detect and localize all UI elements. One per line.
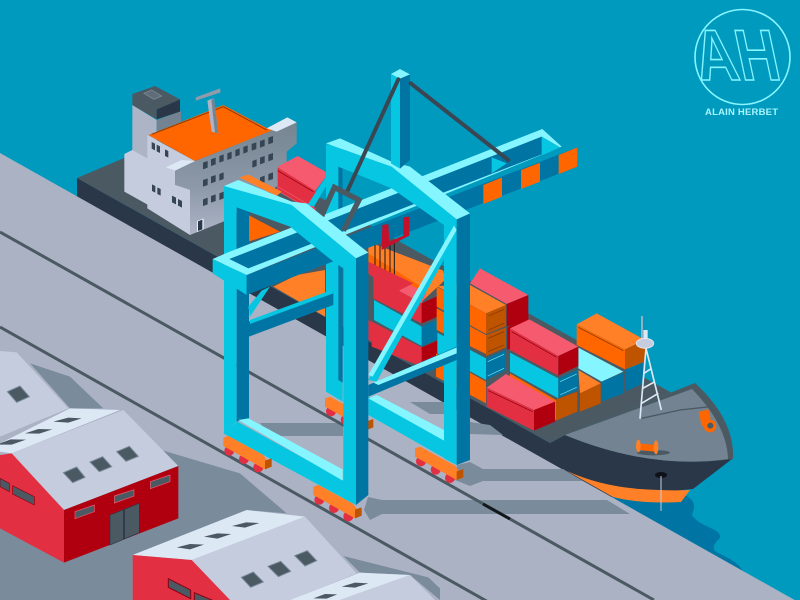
windows <box>75 475 170 519</box>
winch right <box>699 409 716 432</box>
bogie: front left <box>223 436 272 472</box>
red front container <box>487 374 555 431</box>
orange waterline <box>567 471 690 502</box>
back arch <box>326 138 470 225</box>
cables <box>347 79 508 193</box>
bow deck <box>565 383 733 462</box>
red high container <box>510 319 578 376</box>
ship bridge <box>124 86 297 235</box>
red lower extension <box>368 320 422 363</box>
trolley <box>322 187 359 231</box>
water shadow under bow <box>600 490 743 571</box>
radar mast <box>196 88 221 133</box>
red back container <box>470 268 528 350</box>
logo circle <box>695 10 790 104</box>
funnel <box>132 86 181 180</box>
small upper brace <box>307 168 333 207</box>
warehouse: bottom right <box>290 573 435 600</box>
orange second container <box>437 308 506 356</box>
long diagonal brace <box>368 225 457 382</box>
near wing <box>166 160 195 171</box>
door <box>110 503 139 545</box>
bogie: back left <box>325 397 373 433</box>
deck <box>77 128 695 443</box>
orange small stack <box>578 370 601 412</box>
back legs <box>326 145 470 465</box>
anchor hole <box>655 472 667 478</box>
cyan far container <box>578 348 643 402</box>
orange center stack <box>368 245 445 302</box>
warehouse: bottom <box>133 510 357 600</box>
bogie: back right <box>415 447 463 483</box>
rear block <box>124 150 150 206</box>
orange top far container <box>577 313 645 369</box>
red center container <box>368 263 437 323</box>
rail lines <box>0 232 654 600</box>
logo monogram: AH <box>686 16 787 96</box>
side face <box>147 135 195 235</box>
front bottom beam <box>223 418 356 505</box>
front lower brace <box>248 287 333 337</box>
quay <box>0 153 800 600</box>
boom <box>213 129 577 295</box>
shadows <box>30 363 103 408</box>
containers behind crane <box>239 156 445 367</box>
front arch <box>224 180 368 268</box>
crane shadows on quay <box>260 402 630 520</box>
red lower container <box>372 322 437 367</box>
bogie: front right <box>313 485 362 521</box>
back lower brace <box>368 347 457 397</box>
containers foreground <box>368 268 716 455</box>
back bottom beam <box>368 395 457 465</box>
winch left <box>636 440 670 455</box>
warehouses <box>0 351 440 600</box>
cyan low container <box>437 333 506 380</box>
dark hull side <box>77 178 732 500</box>
warehouse: middle <box>0 408 178 563</box>
red rear container <box>278 156 328 213</box>
mast <box>636 316 661 419</box>
door <box>197 218 204 232</box>
mast shadow <box>642 407 710 418</box>
orange right low <box>507 373 577 421</box>
orange roof <box>148 105 272 161</box>
anchor chain <box>660 476 662 511</box>
cyan center container <box>374 300 437 347</box>
orange bottom row <box>436 353 486 403</box>
cyan middle container <box>510 353 578 398</box>
orange upper container <box>437 285 506 334</box>
windows <box>152 136 273 208</box>
front right leg <box>343 253 368 505</box>
logo <box>686 10 790 118</box>
tower <box>391 69 410 169</box>
ship hull <box>77 128 733 511</box>
hazard stripes <box>483 147 577 204</box>
logo name: ALAIN HERBET <box>705 107 778 118</box>
front left leg <box>224 186 249 433</box>
spreader <box>368 217 413 298</box>
orange rear containers <box>239 175 325 317</box>
gantry crane <box>213 69 577 521</box>
front face <box>175 117 297 235</box>
warehouse: top left <box>0 351 68 437</box>
